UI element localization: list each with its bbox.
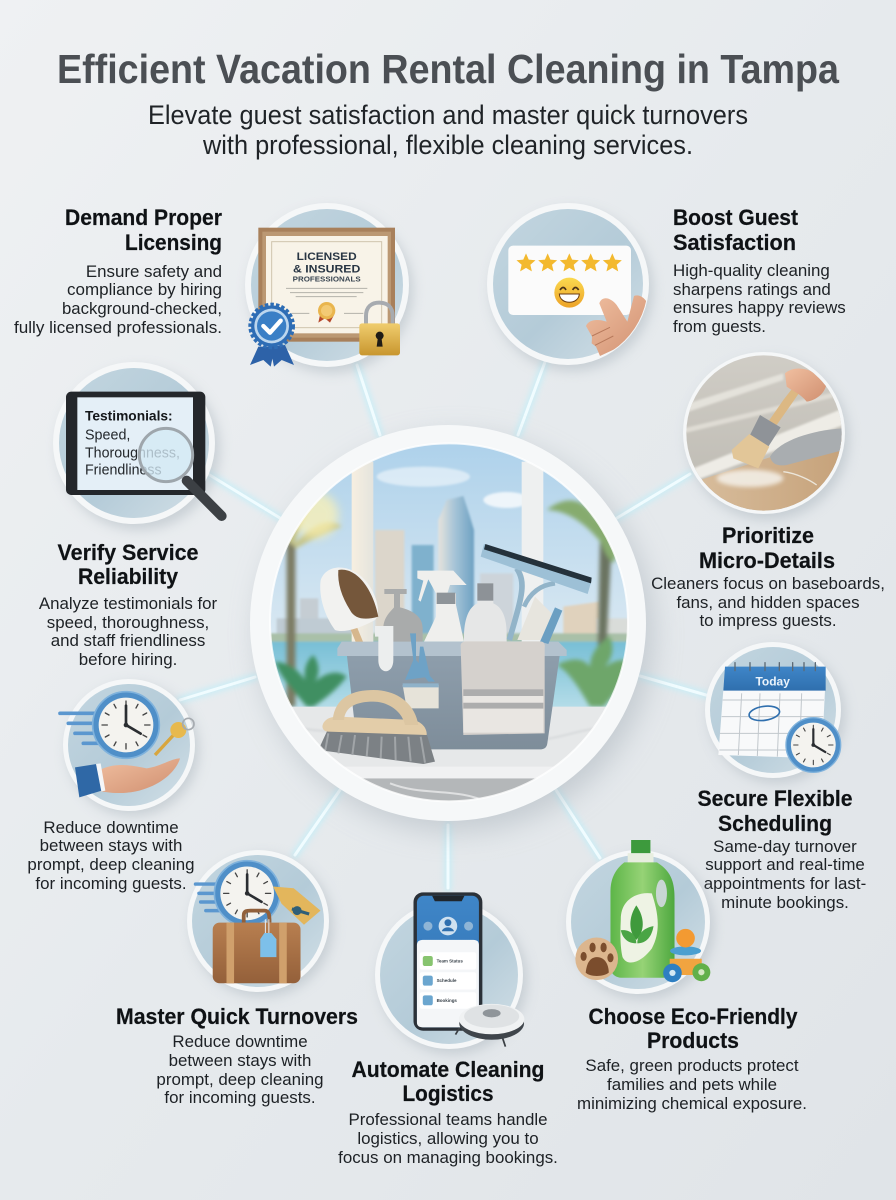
text: demand proper licensing — [14, 262, 222, 337]
icon: smartphone app and robot vacuum: Team Status — [437, 959, 463, 964]
text: secure flexible scheduling: support and real-time — [705, 855, 865, 874]
text: reduce downtime (left): for incoming guests. — [35, 874, 187, 893]
bucket — [347, 653, 560, 749]
bottles — [384, 589, 423, 642]
icon: tablet and magnifier: Thoroughness, — [85, 445, 180, 461]
text: boost guest satisfaction — [673, 261, 846, 336]
text: secure flexible scheduling: minute bookings. — [721, 893, 849, 912]
subtitle — [148, 100, 748, 160]
heading: prioritize micro-details: Micro-Details — [699, 548, 835, 573]
icon: framed certificate — [258, 228, 395, 342]
heading: choose eco-friendly products — [588, 1004, 798, 1053]
text: prioritize micro-details — [651, 574, 885, 630]
text: demand proper licensing: compliance by hiring — [67, 280, 222, 299]
text: verify service reliability: and staff friendliness — [51, 631, 205, 650]
text: secure flexible scheduling: appointments for last- — [704, 874, 866, 893]
heading: secure flexible scheduling: Secure Flexible — [698, 786, 852, 811]
text: choose eco-friendly products — [577, 1056, 807, 1113]
heading: verify service reliability — [58, 540, 198, 589]
text: reduce downtime (left): Reduce downtime — [43, 818, 179, 837]
scoop and hanging brush — [375, 626, 393, 671]
text: master quick turnovers: between stays with — [169, 1051, 311, 1070]
heading: choose eco-friendly products: Choose Eco-Friendly — [588, 1004, 798, 1029]
text: verify service reliability: speed, thoroughness, — [47, 613, 209, 632]
text: prioritize micro-details: fans, and hidden spaces — [676, 593, 860, 612]
icon: smartphone app and robot vacuum — [413, 892, 524, 1047]
text: verify service reliability: before hiring. — [79, 650, 177, 669]
heading: master quick turnovers: Master Quick Turnovers — [116, 1004, 358, 1029]
icon: smartphone app and robot vacuum: Schedule — [437, 978, 457, 983]
title: Efficient Vacation Rental Cleaning in Tampa — [57, 46, 840, 92]
text: boost guest satisfaction: High-quality cleaning — [673, 261, 830, 280]
icon: smartphone app and robot vacuum: Bookings — [437, 998, 457, 1003]
icon: paint brush on baseboard — [683, 353, 847, 517]
icon: tablet and magnifier — [66, 392, 222, 516]
connectors — [180, 362, 706, 888]
text: automate cleaning logistics: Professional teams handle — [348, 1110, 548, 1129]
text: automate cleaning logistics: logistics, allowing you to — [357, 1129, 539, 1148]
heading: boost guest satisfaction — [673, 205, 799, 255]
heading: secure flexible scheduling: Scheduling — [718, 811, 832, 836]
panel: prioritize micro-details — [683, 352, 849, 520]
heading: boost guest satisfaction: Satisfaction — [673, 230, 796, 255]
heading: prioritize micro-details: Prioritize — [722, 523, 814, 548]
panel: verify service reliability — [53, 362, 222, 530]
icon: padlock — [359, 303, 400, 355]
text: reduce downtime (left): between stays with — [40, 836, 182, 855]
text: secure flexible scheduling — [704, 837, 866, 912]
text: demand proper licensing: Ensure safety and — [86, 262, 222, 281]
subtitle: Elevate guest satisfaction and master quick turnovers — [148, 100, 748, 130]
text: automate cleaning logistics: focus on managing bookings. — [338, 1148, 558, 1167]
icon: clock, key tag and suitcase — [195, 861, 321, 983]
icon: framed certificate: & INSURED — [293, 263, 360, 275]
panel: secure flexible scheduling — [705, 642, 845, 783]
subtitle: with professional, flexible cleaning services. — [202, 130, 693, 160]
central hero image — [250, 420, 654, 832]
icon: calendar and clock — [718, 663, 841, 772]
heading: automate cleaning logistics: Automate Cleaning — [352, 1057, 544, 1082]
panel: choose eco-friendly products — [566, 840, 714, 999]
icon: framed certificate: LICENSED — [297, 251, 357, 263]
text: master quick turnovers: prompt, deep cleaning — [156, 1070, 324, 1089]
text: master quick turnovers: Reduce downtime — [172, 1032, 308, 1051]
text: demand proper licensing: background-checked, — [62, 299, 222, 318]
heading: automate cleaning logistics — [352, 1057, 544, 1106]
text: choose eco-friendly products: Safe, green products protect — [585, 1056, 799, 1075]
text: verify service reliability: Analyze testimonials for — [39, 594, 218, 613]
heading: boost guest satisfaction: Boost Guest — [673, 205, 799, 230]
icon: calendar and clock: Today — [755, 674, 790, 688]
heading: demand proper licensing: Demand Proper — [65, 205, 222, 230]
text: verify service reliability — [39, 594, 218, 669]
heading: demand proper licensing — [65, 205, 222, 255]
text: secure flexible scheduling: Same-day turnover — [713, 837, 857, 856]
icon: clock, key and open hand — [60, 692, 194, 797]
towel — [461, 641, 545, 735]
panel: automate cleaning logistics — [375, 892, 527, 1054]
icon: blue ribbon badge — [250, 305, 294, 367]
icon: green bottle, paw and toy — [575, 840, 710, 982]
text: prioritize micro-details: to impress guests. — [699, 611, 837, 630]
heading: demand proper licensing: Licensing — [125, 230, 222, 255]
text: choose eco-friendly products: minimizing chemical exposure. — [577, 1094, 807, 1113]
panel: clock and key — [60, 679, 199, 816]
icon: review card with stars and hand — [508, 246, 650, 356]
heading: prioritize micro-details — [699, 523, 835, 573]
text: demand proper licensing: fully licensed professionals. — [14, 318, 222, 337]
text: reduce downtime (left) — [27, 818, 195, 893]
text: prioritize micro-details: Cleaners focus on baseboards, — [651, 574, 885, 593]
small brush — [517, 597, 552, 640]
heading: choose eco-friendly products: Products — [647, 1028, 739, 1053]
panel: demand proper licensing — [245, 203, 413, 373]
round brush — [350, 628, 363, 642]
text: reduce downtime (left): prompt, deep cleaning — [27, 855, 195, 874]
heading: secure flexible scheduling — [698, 786, 852, 836]
heading: verify service reliability: Reliability — [78, 564, 179, 589]
icon: tablet and magnifier: Friendliness — [85, 462, 162, 478]
text: master quick turnovers — [156, 1032, 324, 1107]
text: master quick turnovers: for incoming guests. — [164, 1088, 316, 1107]
panel: boost guest satisfaction — [487, 203, 653, 371]
text: boost guest satisfaction: ensures happy reviews — [673, 298, 846, 317]
squeegee — [509, 568, 522, 640]
panel: master quick turnovers — [187, 850, 333, 997]
text: choose eco-friendly products: families and pets while — [607, 1075, 777, 1094]
icon: framed certificate: PROFESSIONALS — [293, 277, 361, 284]
heading: automate cleaning logistics: Logistics — [402, 1081, 494, 1106]
heading: verify service reliability: Verify Service — [58, 540, 198, 565]
icon: tablet and magnifier: Testimonials: — [85, 408, 173, 424]
icon: tablet and magnifier: Speed, — [85, 427, 130, 443]
text: boost guest satisfaction: sharpens ratings and — [673, 280, 831, 299]
text: automate cleaning logistics — [338, 1110, 558, 1167]
scrub brush — [320, 732, 435, 764]
text: boost guest satisfaction: from guests. — [673, 317, 766, 336]
